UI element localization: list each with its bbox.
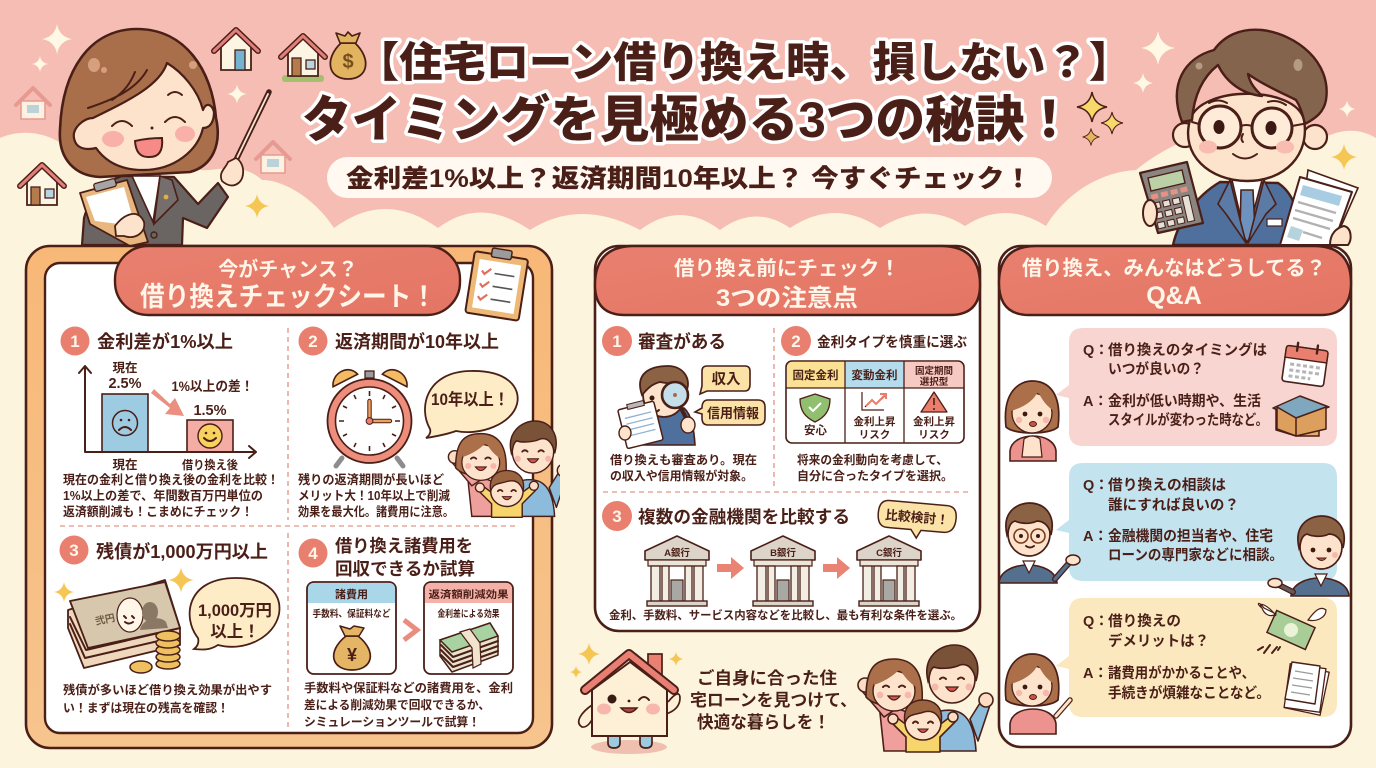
card: fees bbox=[307, 582, 396, 674]
panel header: 3つの注意点 bbox=[716, 285, 858, 312]
icon: sparkles bbox=[570, 643, 683, 678]
title: 【住宅ローン借り換え時、損しない？】 bbox=[356, 39, 1132, 86]
text block: 金利、手数料、サービス内容などを比較し、最も有利な条件を選ぶ。 bbox=[609, 608, 962, 622]
panel header bbox=[999, 246, 1351, 315]
item 1: rate difference: 1 bbox=[70, 332, 80, 351]
text block: 1%以上の差で、年間数百万円単位の bbox=[63, 488, 263, 503]
text block: 将来の金利動向を考慮して、 bbox=[797, 452, 948, 467]
icon: happy family bbox=[858, 645, 993, 752]
card: savings: 返済額削減効果 bbox=[428, 588, 508, 601]
item 1: screening: 審査がある bbox=[638, 331, 726, 352]
item 2: rate type bbox=[781, 326, 967, 483]
comparison table: 安心 bbox=[804, 423, 827, 437]
icon: man with magnifying glass bbox=[617, 366, 695, 449]
arrow bbox=[823, 557, 850, 579]
comparison table: 金利上昇 bbox=[854, 415, 896, 428]
Q&A card: downsides: 諸費用がかかることや、 bbox=[1108, 664, 1255, 682]
callout: credit information bbox=[695, 400, 765, 425]
text block: 借り換えも審査あり。現在 bbox=[610, 452, 757, 467]
item 3: compare institutions: 複数の金融機関を比較する bbox=[638, 507, 850, 527]
item 3: remaining balance: 残債が1,000万円以上 bbox=[96, 541, 268, 562]
icon: alarm clock bbox=[328, 368, 412, 466]
icon: dollar money bag: $ bbox=[342, 51, 354, 73]
icon: gold sparkles by title bbox=[1077, 92, 1123, 146]
Q&A card: timing bbox=[1005, 328, 1337, 461]
text block: 手数料や保証料などの諸費用を、金利 bbox=[304, 680, 513, 695]
icon: banker bbox=[1268, 516, 1349, 596]
item 3: compare institutions: 3 bbox=[612, 507, 622, 526]
card: fees: 手数料、保証料など bbox=[312, 608, 391, 620]
comparison table: 金利上昇 bbox=[913, 415, 955, 428]
item 1: rate difference bbox=[60, 326, 282, 519]
icon: clipboard bbox=[465, 245, 529, 321]
icon: rising chart bbox=[862, 392, 886, 410]
Q&A card: timing: Q： bbox=[1083, 343, 1109, 359]
Q&A card: timing: いつが良いの？ bbox=[1108, 360, 1204, 378]
icon: house near title bbox=[281, 36, 325, 82]
speech bubble bbox=[190, 578, 279, 650]
bar chart: 1.5% bbox=[193, 403, 227, 419]
panel header bbox=[115, 246, 460, 315]
callout: compare bbox=[876, 500, 957, 541]
icon: cash stack bbox=[440, 623, 498, 672]
text block: 差による削減効果で回収できるか、 bbox=[304, 697, 490, 712]
character: woman with pointer bbox=[60, 29, 269, 246]
icon: sparkles around woman bbox=[32, 24, 269, 218]
panel header: Q&A bbox=[1146, 282, 1202, 310]
Q&A card: downsides: 手続きが煩雑なことなど。 bbox=[1108, 684, 1270, 702]
icon: banknote stack and coins: 弐円 bbox=[94, 612, 116, 628]
icon: smiling house mascot bbox=[579, 654, 680, 754]
item 4: fee recovery: 4 bbox=[308, 544, 318, 563]
subtitle pill: 金利差1%以上？返済期間10年以上？ 今すぐチェック！ bbox=[346, 164, 1032, 193]
card: fees: 諸費用 bbox=[335, 587, 368, 601]
Q&A card: who to consult: ローンの専門家などに相談。 bbox=[1108, 546, 1283, 564]
arrow: fees less than savings bbox=[404, 620, 417, 640]
closing message bbox=[570, 643, 993, 754]
bank C: C銀行 bbox=[876, 547, 902, 559]
Q&A card: downsides: Q： bbox=[1083, 614, 1109, 630]
panel header: 借り換え前にチェック！ bbox=[674, 257, 900, 280]
bank A: A銀行 bbox=[664, 547, 690, 559]
text block: 残りの返済期間が長いほど bbox=[298, 472, 444, 487]
comparison table: 固定期間 bbox=[915, 365, 953, 377]
Q&A card: who to consult: Q： bbox=[1083, 478, 1109, 494]
item 1: rate difference: 金利差が1%以上 bbox=[97, 331, 233, 352]
icon: dollar money bag bbox=[330, 32, 366, 79]
Q&A card: timing: A： bbox=[1083, 394, 1108, 410]
panel: three cautions bbox=[595, 246, 980, 631]
text block: 現在の金利と借り換え後の金利を比較！ bbox=[63, 472, 279, 487]
icon: cardboard box bbox=[1273, 396, 1329, 436]
item 2: rate type: 2 bbox=[791, 332, 801, 351]
callout: credit information: 信用情報 bbox=[707, 405, 759, 421]
subtitle pill bbox=[327, 157, 1052, 198]
icon: warning triangle bbox=[921, 392, 947, 412]
arrow bbox=[717, 557, 744, 579]
bank A bbox=[645, 536, 709, 606]
icon: banknote stack and coins bbox=[54, 568, 194, 673]
speech bubble: 1,000万円 bbox=[198, 602, 272, 620]
bar chart: 現在 bbox=[112, 457, 138, 472]
bar chart: 2.5% bbox=[108, 376, 142, 392]
icon: calendar bbox=[1282, 341, 1329, 387]
icon: small pale houses bbox=[16, 88, 290, 173]
item 2: rate type: 金利タイプを慎重に選ぶ bbox=[817, 334, 967, 350]
item 3: compare institutions bbox=[602, 500, 962, 622]
panel: refinancing check sheet bbox=[26, 245, 570, 748]
text block: メリット大！10年以上で削減 bbox=[298, 488, 450, 503]
comparison table: 選択型 bbox=[920, 376, 949, 388]
text block: シミュレーションツールで試算！ bbox=[304, 714, 480, 729]
callout: income: 収入 bbox=[712, 371, 741, 388]
bank C bbox=[857, 536, 921, 606]
item 1: screening: 1 bbox=[612, 332, 622, 351]
comparison table: リスク bbox=[918, 429, 950, 441]
Q&A card: timing: 借り換えのタイミングは bbox=[1108, 341, 1267, 359]
panel header bbox=[595, 246, 980, 315]
comparison table: 固定金利 bbox=[792, 368, 838, 382]
message text: 宅ローンを見つけて、 bbox=[690, 691, 857, 710]
speech bubble: 10年以上！ bbox=[431, 389, 509, 409]
item 3: remaining balance: 3 bbox=[69, 541, 79, 560]
text block: い！まずは現在の残高を確認！ bbox=[63, 700, 229, 715]
item 2: repayment period: 2 bbox=[308, 332, 318, 351]
speech bubble: 以上！ bbox=[210, 622, 260, 641]
text block: 返済額削減も！こまめにチェック！ bbox=[63, 504, 253, 519]
card: savings bbox=[424, 582, 513, 674]
panel header: 借り換えチェックシート！ bbox=[140, 282, 436, 312]
comparison table bbox=[786, 361, 964, 443]
bar chart: 現在 bbox=[112, 360, 138, 375]
Q&A card: who to consult: 借り換えの相談は bbox=[1108, 476, 1227, 494]
callout: income bbox=[700, 366, 750, 394]
text block: 自分に合ったタイプを選択。 bbox=[797, 468, 953, 483]
icon: woman asking bbox=[1005, 381, 1059, 461]
message text: ご自身に合った住 bbox=[697, 668, 837, 688]
icon: house at left bbox=[20, 165, 64, 205]
item 4: fee recovery bbox=[298, 536, 516, 729]
icon: shield bbox=[800, 394, 830, 422]
item 2: repayment period bbox=[298, 326, 570, 519]
text block: 効果を最大化。諸費用に注意。 bbox=[298, 504, 454, 519]
icon: flying money bbox=[1258, 603, 1326, 653]
icon: happy family bbox=[448, 421, 570, 517]
title bbox=[302, 39, 1132, 148]
panel header: 今がチャンス？ bbox=[218, 257, 358, 281]
Q&A card: who to consult: A： bbox=[1083, 529, 1108, 545]
Q&A card: downsides: デメリットは？ bbox=[1108, 632, 1209, 650]
card: savings: 金利差による効果 bbox=[438, 608, 500, 620]
bank B: B銀行 bbox=[770, 547, 796, 559]
header pink band with cloud edge bbox=[0, 0, 1376, 268]
bar chart: 1%以上の差！ bbox=[172, 378, 254, 394]
bank B bbox=[751, 536, 815, 606]
Q&A card: who to consult: 誰にすれば良いの？ bbox=[1108, 496, 1239, 514]
icon: yen money bag: ¥ bbox=[347, 645, 357, 665]
icon: sparkles around man bbox=[1133, 31, 1357, 170]
icon: house with blue door bbox=[214, 30, 258, 70]
item 4: fee recovery: 借り換え諸費用を bbox=[335, 536, 473, 556]
message text: 快適な暮らしを！ bbox=[697, 713, 830, 732]
callout: compare: 比較検討！ bbox=[885, 507, 950, 528]
icon: woman thinking bbox=[1005, 654, 1070, 734]
bar chart bbox=[79, 360, 256, 472]
Q&A card: who to consult bbox=[999, 463, 1349, 596]
Q&A card: downsides: 借り換えの bbox=[1108, 612, 1181, 630]
panel header: 借り換え、みんなはどうしてる？ bbox=[1022, 257, 1326, 280]
character: man with calculator and document bbox=[1140, 30, 1358, 245]
item 4: fee recovery: 回収できるか試算 bbox=[335, 559, 475, 579]
item 3: remaining balance bbox=[54, 536, 279, 715]
comparison table: リスク bbox=[859, 429, 890, 441]
speech bubble bbox=[425, 371, 518, 438]
icon: stack of documents bbox=[1284, 662, 1329, 715]
Q&A card: timing: スタイルが変わった時など。 bbox=[1108, 411, 1268, 429]
bar chart: 借り換え後 bbox=[182, 457, 238, 472]
Q&A card: timing: 金利が低い時期や、生活 bbox=[1108, 392, 1261, 410]
item 2: repayment period: 返済期間が10年以上 bbox=[335, 331, 499, 352]
text block: 残債が多いほど借り換え効果が出やす bbox=[63, 682, 272, 697]
Q&A card: downsides: A： bbox=[1083, 666, 1108, 682]
text block: の収入や信用情報が対象。 bbox=[610, 468, 753, 483]
Q&A card: downsides bbox=[1005, 598, 1337, 734]
panel: Q&A bbox=[999, 246, 1351, 747]
icon: consultant with glasses bbox=[999, 503, 1080, 583]
item 1: screening bbox=[602, 326, 765, 483]
Q&A card: who to consult: 金融機関の担当者や、住宅 bbox=[1108, 527, 1273, 545]
comparison table: 変動金利 bbox=[852, 368, 898, 382]
title: タイミングを見極める3つの秘訣！ bbox=[302, 92, 1074, 148]
